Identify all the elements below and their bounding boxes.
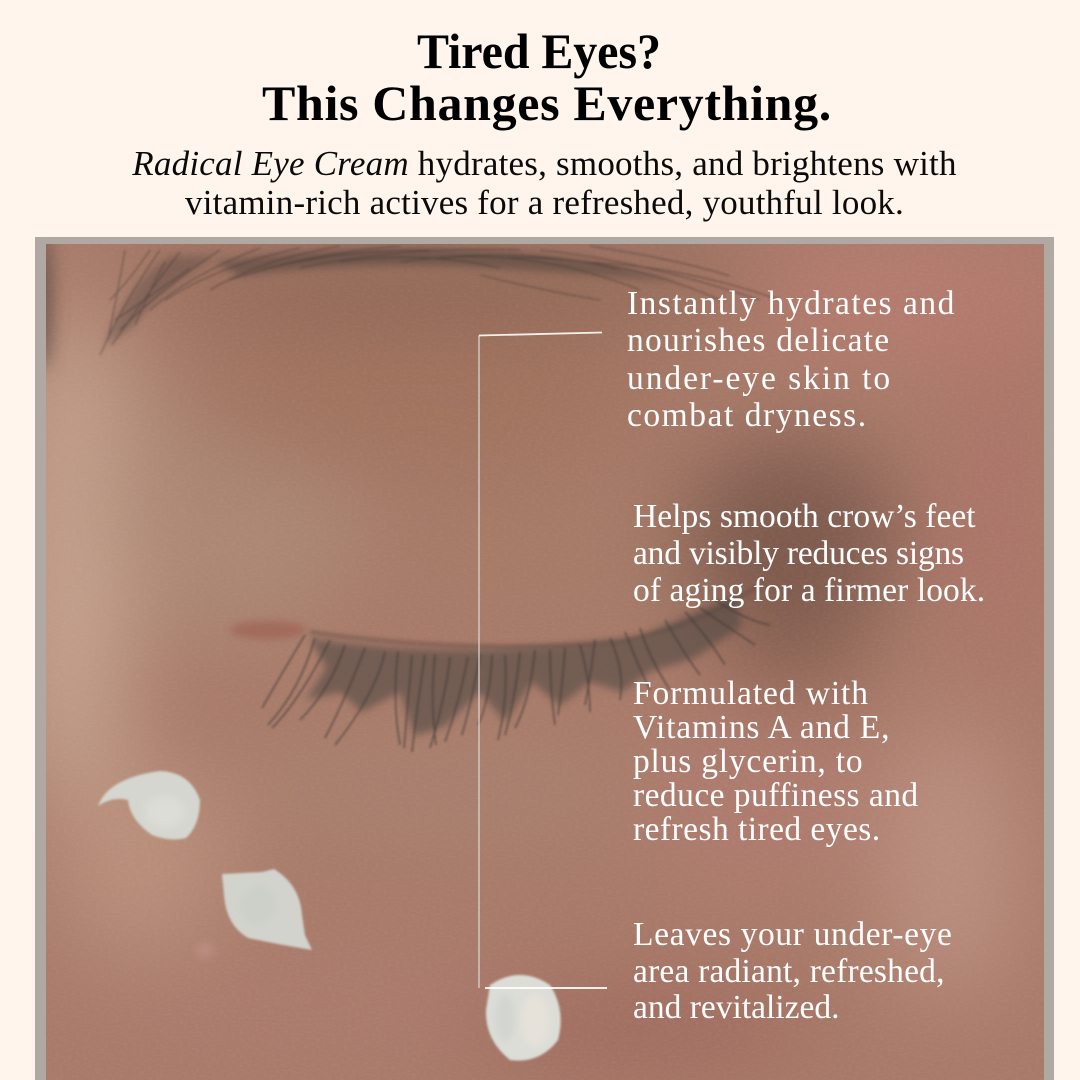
callout 3: Vitamins A and E,	[633, 709, 890, 746]
title	[262, 23, 832, 131]
subtitle	[132, 144, 957, 222]
callout 1: combat dryness.	[627, 397, 868, 434]
left dark edge	[46, 244, 62, 372]
skin grain	[46, 244, 1044, 1080]
eyelashes	[262, 596, 770, 752]
callout 3	[633, 675, 919, 848]
callout 3: plus glycerin, to	[633, 743, 863, 780]
title: Tired Eyes?	[417, 23, 661, 79]
callout 3: reduce puffiness and	[633, 777, 919, 814]
callout 2: Helps smooth crow’s feet	[633, 498, 976, 535]
cream dollops	[98, 771, 561, 1061]
subtitle: vitamin-rich actives for a refreshed, youthful look.	[185, 183, 904, 222]
callout 4	[633, 916, 952, 1026]
callout 1: under-eye skin to	[627, 360, 892, 397]
callout 4: Leaves your under-eye	[633, 916, 952, 953]
callout 2: and visibly reduces signs	[633, 535, 964, 572]
callout 1: nourishes delicate	[627, 322, 890, 359]
photo panel: closed eye with cream	[35, 237, 1054, 1080]
callout 1: Instantly hydrates and	[627, 285, 956, 322]
callout 4: and revitalized.	[633, 989, 839, 1026]
eyelid crease and inner corner	[230, 585, 760, 647]
callout 2: of aging for a firmer look.	[633, 572, 985, 609]
callout 2	[633, 498, 985, 609]
callout 3: Formulated with	[633, 675, 869, 712]
callout 4: area radiant, refreshed,	[633, 953, 945, 990]
callout 3: refresh tired eyes.	[633, 811, 881, 848]
callout 1	[627, 285, 956, 434]
title: This Changes Everything.	[262, 75, 832, 131]
subtitle: Radical Eye Cream hydrates, smooths, and brightens with	[132, 144, 957, 183]
eyebrow	[100, 246, 780, 355]
bracket line	[479, 332, 607, 988]
